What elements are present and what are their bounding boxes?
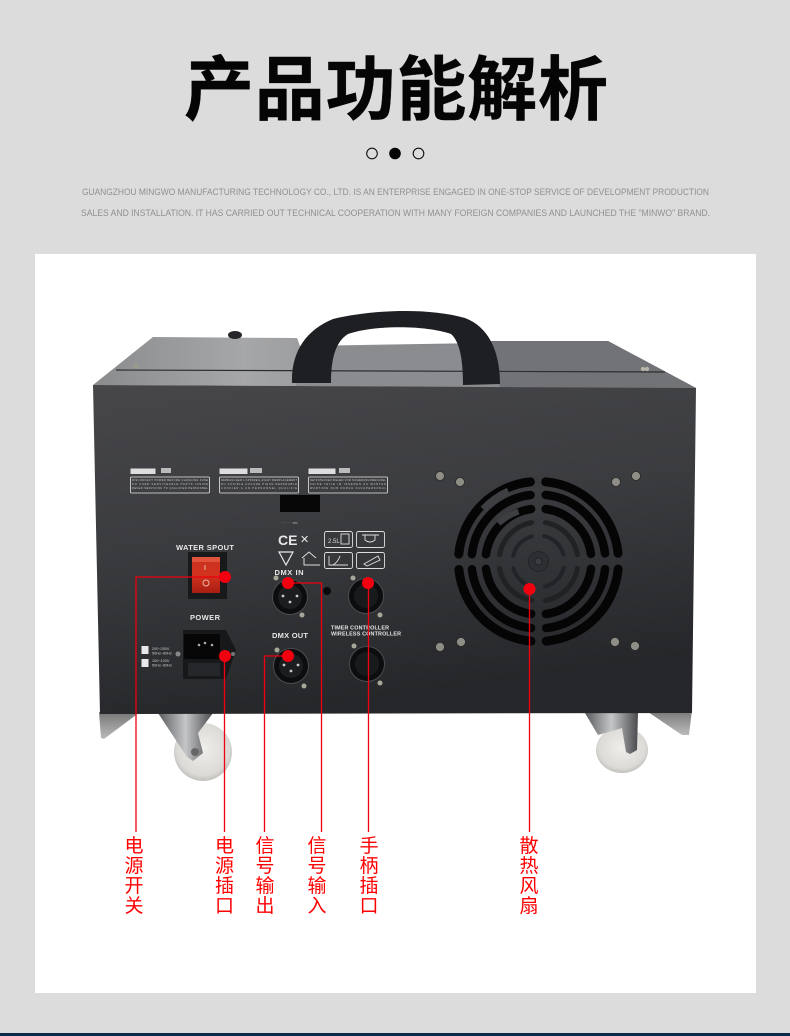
certification marks: · · · · · ▪▪▪▪ bbox=[282, 521, 298, 525]
callout: power socket: 口 bbox=[215, 896, 234, 917]
voltage selector: 100~120V bbox=[152, 659, 170, 663]
callout: handle socket: 手 bbox=[359, 835, 379, 857]
warning labels: WARTUNG NUR DURCH FACHPERSONAL bbox=[310, 486, 387, 490]
callout: cooling fan: 散 bbox=[519, 835, 539, 857]
left caster wheel bbox=[158, 713, 232, 781]
callout: power switch: 电 bbox=[124, 835, 144, 857]
warning labels: KEINE TEILE IM INNEREN ZU WARTEN bbox=[310, 482, 386, 486]
callout: power switch: 开 bbox=[124, 876, 144, 897]
panel labels: DMX OUT bbox=[272, 631, 308, 640]
callout: power socket: 源 bbox=[215, 855, 234, 877]
panel labels bbox=[176, 543, 401, 640]
callout: signal input bbox=[282, 577, 327, 917]
certification marks bbox=[278, 521, 320, 565]
IEC power socket bbox=[183, 630, 236, 679]
callout: signal output: 输 bbox=[255, 875, 275, 897]
callout: signal input: 输 bbox=[307, 875, 327, 897]
company description text: GUANGZHOU MINGWO MANUFACTURING TECHNOLOGY CO., LTD. IS AN ENTERPRISE ENGAGED IN ONE-STOP SERVICE OF DEVELOPMENT PRODUCTION bbox=[82, 187, 709, 198]
right floor flange bbox=[645, 710, 692, 735]
product: fog machine rear view bbox=[93, 311, 696, 781]
company description text bbox=[81, 187, 710, 219]
rocker power switch bbox=[188, 552, 227, 599]
panel labels: TIMER CONTROLLER bbox=[331, 626, 389, 632]
callout: handle socket: 口 bbox=[359, 896, 379, 917]
carrying handle bbox=[292, 311, 500, 385]
specification icons bbox=[324, 532, 384, 568]
callout: power switch: 关 bbox=[124, 895, 144, 917]
warning labels: DEBRANCHER L'APPAREIL AVANT REMPLACEMENT bbox=[221, 478, 297, 482]
callout: power socket bbox=[215, 650, 234, 917]
callout: cooling fan: 扇 bbox=[519, 895, 539, 917]
bottom dark strip bbox=[0, 1033, 790, 1036]
warning labels: NO USER SERVICEABLE PARTS INSIDE bbox=[132, 482, 208, 486]
panel: white product panel bbox=[35, 254, 756, 993]
voltage selector: 50Hz~60Hz bbox=[152, 664, 172, 668]
callout: signal output bbox=[255, 650, 294, 917]
certification marks: CE bbox=[278, 532, 297, 548]
voltage selector: 200~250V bbox=[152, 647, 170, 651]
warning labels: REFER SERVICING TO QUALIFIED PERSONNEL bbox=[132, 486, 209, 490]
certification marks: ✕ bbox=[300, 534, 309, 546]
right caster wheel bbox=[585, 713, 648, 773]
panel labels: POWER bbox=[190, 613, 221, 622]
panel labels: DMX IN bbox=[274, 568, 304, 577]
left floor flange bbox=[99, 712, 140, 739]
panel labels: WIRELESS CONTROLLER bbox=[331, 632, 401, 638]
voltage selector bbox=[142, 646, 180, 668]
voltage selector: 50Hz~60Hz bbox=[152, 652, 172, 656]
panel labels: WATER SPOUT bbox=[176, 543, 234, 552]
warning labels: DU FUSIBLE AUCUNE PIECE REPARABLE bbox=[221, 482, 297, 486]
callout: signal input: 号 bbox=[307, 856, 327, 877]
callout: signal input: 信 bbox=[307, 835, 327, 857]
warning labels: NETZSTECKER ZIEHEN VOR SICHERUNGSWECHSEL bbox=[310, 478, 387, 482]
warning labels bbox=[130, 468, 388, 493]
top cover surface bbox=[93, 331, 696, 388]
pagination dots bbox=[367, 148, 424, 159]
callout: handle socket: 插 bbox=[359, 875, 379, 897]
callout: cooling fan: 热 bbox=[519, 855, 539, 877]
callout: cooling fan: 风 bbox=[519, 876, 539, 897]
XLR connectors bbox=[272, 576, 384, 688]
warning labels: CONFIER A UN PERSONNEL QUALIFIE bbox=[221, 486, 297, 490]
front panel bbox=[93, 385, 696, 714]
callout: signal output: 信 bbox=[255, 835, 275, 857]
specification icons: 2.5L bbox=[328, 539, 340, 545]
callout: handle socket: 柄 bbox=[359, 855, 379, 877]
black label patch bbox=[280, 495, 320, 512]
callout: cooling fan bbox=[519, 583, 539, 917]
warning labels: DISCONNECT POWER BEFORE CHANGING FUSE bbox=[132, 478, 208, 482]
callout: power switch bbox=[124, 571, 231, 917]
callout: signal output: 出 bbox=[255, 895, 275, 917]
callout: signal output: 号 bbox=[255, 856, 275, 877]
callout: power switch: 源 bbox=[124, 855, 144, 877]
callout: handle socket bbox=[359, 577, 379, 917]
callout: power socket: 电 bbox=[215, 835, 234, 857]
cooling fan grille bbox=[458, 482, 618, 642]
company description text: SALES AND INSTALLATION. IT HAS CARRIED OUT TECHNICAL COOPERATION WITH MANY FOREIGN COMPANIES AND LAUNCHED THE "MINWO" BRAND. bbox=[81, 208, 710, 219]
callout: power socket: 插 bbox=[215, 875, 234, 897]
callout: signal input: 入 bbox=[307, 896, 327, 917]
title: 产品功能解析 bbox=[184, 51, 608, 129]
fan mounting screws bbox=[436, 472, 640, 652]
